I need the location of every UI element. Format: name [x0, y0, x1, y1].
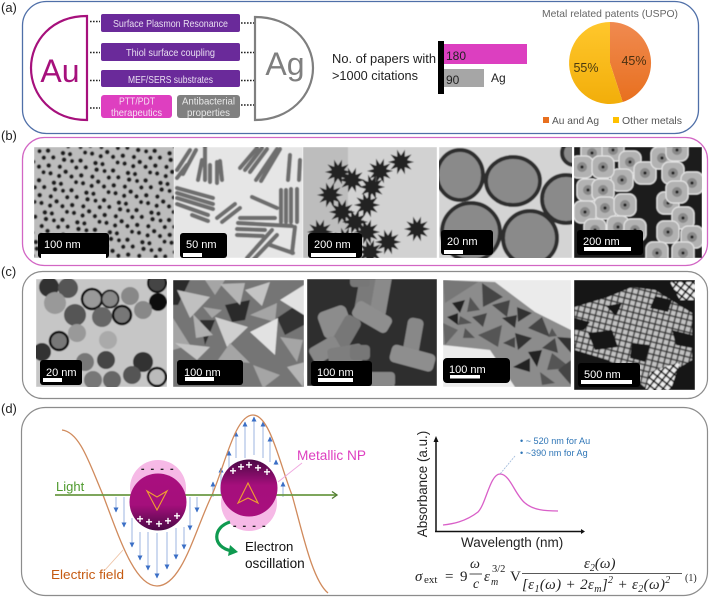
light ray: Light	[56, 479, 85, 494]
equation 1: [ε	[522, 577, 534, 593]
equation 1: =	[445, 569, 453, 585]
nanoparticle with electrons displaced upward	[130, 460, 186, 531]
label: (c): (c)	[1, 264, 16, 279]
pie chart: metal related patents: 45%	[621, 54, 647, 68]
micrograph: Ag nanoprisms: 100 nm	[449, 364, 486, 376]
micrograph: Au nanostars	[303, 147, 437, 264]
nanoparticle with electrons displaced downward: +	[237, 460, 245, 474]
box: PTT/PDT therapeutics: PTT/PDT	[119, 96, 155, 108]
equation 1: V	[510, 569, 521, 585]
equation 1	[415, 556, 697, 595]
box: Antibacterial properties: properties	[187, 108, 230, 119]
label: electric field	[51, 550, 124, 582]
nanoparticle with electrons displaced upward: +	[145, 515, 153, 529]
micrograph: Ag nanocubes	[574, 280, 695, 392]
absorbance chart: Absorbance (a.u.)	[415, 431, 430, 537]
icon: Ag half disc	[255, 17, 313, 120]
bar chart: papers with over 1000 citations: No. of papers with	[332, 51, 436, 66]
pie chart: metal related patents	[542, 9, 682, 127]
label: metallic NP	[278, 448, 366, 482]
equation 1: 2	[638, 584, 644, 595]
label: electron oscillation: oscillation	[245, 556, 305, 571]
micrograph: Ag nanoprisms	[443, 280, 571, 387]
icon: Ag half disc: Ag	[265, 46, 305, 82]
micrograph: Au spheres: 100 nm	[44, 239, 81, 251]
equation 1: + ε	[613, 577, 638, 593]
bar chart: papers with over 1000 citations: Ag	[491, 71, 506, 85]
pie chart: metal related patents: 55%	[573, 61, 599, 75]
equation 1: ext	[424, 574, 437, 586]
light ray	[55, 479, 337, 498]
label: (d): (d)	[1, 401, 17, 416]
equation 1: 3/2	[492, 564, 505, 575]
nanoparticle with electrons displaced downward: - - - -	[233, 520, 267, 532]
absorbance chart: Wavelength (nm)	[461, 535, 563, 550]
micrograph: Au nanocages	[574, 147, 702, 258]
micrograph: Ag nanocubes: 500 nm	[584, 369, 621, 381]
box: Surface Plasmon Resonance	[101, 14, 240, 32]
label: (a): (a)	[1, 0, 17, 15]
equation 1: (1)	[685, 573, 697, 584]
micrograph: Ag octahedra: 100 nm	[184, 367, 221, 379]
dotted connectors	[90, 22, 254, 108]
label: electron oscillation	[245, 539, 305, 571]
equation 1: ]	[601, 577, 608, 593]
micrograph: Au nanorods	[174, 147, 303, 260]
label: electron oscillation: Electron	[245, 539, 293, 554]
equation 1: 9	[460, 569, 468, 585]
micrograph: Au core shell particles: 20 nm	[447, 236, 478, 248]
box: MEF/SERS substrates: MEF/SERS substrates	[128, 75, 213, 86]
micrograph: Au core shell particles	[439, 147, 572, 258]
icon: Au half disc: Au	[40, 53, 80, 89]
nanoparticle with electrons displaced downward: +	[263, 465, 271, 479]
box: Thiol surface coupling	[101, 43, 240, 61]
panel: gold nanostructure micrographs	[22, 138, 708, 266]
box: PTT/PDT therapeutics	[101, 95, 172, 119]
bar chart: papers with over 1000 citations: 180	[446, 49, 466, 63]
equation 1: m	[594, 584, 602, 595]
box: MEF/SERS substrates	[101, 70, 240, 87]
label: (b): (b)	[1, 128, 17, 143]
box: Antibacterial properties	[177, 95, 240, 119]
electric field wave	[62, 415, 328, 593]
bar chart: papers with over 1000 citations: 90	[446, 73, 460, 87]
micrograph: Ag spheres	[33, 274, 167, 389]
nanoparticle with electrons displaced downward	[220, 458, 278, 532]
nanoparticle with electrons displaced upward: - - - -	[141, 463, 175, 475]
micrograph: Ag rounded bars	[307, 271, 437, 387]
box: PTT/PDT therapeutics: therapeutics	[111, 108, 162, 119]
equation 1: (ω)	[595, 556, 616, 572]
equation 1: ω	[470, 557, 480, 572]
absorbance chart: • ~ 520 nm for Au	[520, 436, 590, 446]
nanoparticle with electrons displaced upward: +	[173, 509, 181, 523]
equation 1: 2	[590, 563, 595, 574]
pie chart: metal related patents: Au and Ag	[552, 116, 599, 127]
micrograph: Au spheres	[34, 147, 174, 258]
nanoparticle with electrons displaced upward: +	[136, 512, 144, 526]
box: Antibacterial properties: Antibacterial	[182, 96, 235, 108]
absorbance chart: • ~390 nm for Ag	[520, 448, 588, 458]
pie chart: metal related patents: Other metals	[622, 116, 682, 127]
icon: Au half disc	[31, 16, 87, 120]
equation 1: ε	[584, 556, 590, 572]
micrograph: Au nanorods: 50 nm	[186, 239, 217, 251]
nanoparticle with electrons displaced downward: +	[254, 461, 262, 475]
micrograph: Ag rounded bars: 100 nm	[317, 367, 354, 379]
box: Thiol surface coupling: Thiol surface coupling	[126, 48, 215, 59]
micrograph: Au nanocages: 200 nm	[583, 236, 620, 248]
equation 1: (ω) + 2ε	[540, 577, 594, 593]
bar chart: papers with over 1000 citations: >1000 citations	[332, 68, 418, 83]
absorbance chart	[415, 431, 590, 550]
nanoparticle with electrons displaced downward: +	[229, 464, 237, 478]
equation 1: c	[473, 577, 480, 592]
panel: Au and Ag comparison	[22, 2, 698, 134]
equation 1: m	[491, 577, 498, 588]
panel: silver nanostructure micrographs	[22, 271, 708, 398]
equation 1: σ	[415, 569, 423, 585]
nanoparticle with electrons displaced upward: +	[164, 514, 172, 528]
equation 1: 1	[534, 584, 540, 595]
nanoparticle with electrons displaced upward: +	[155, 517, 163, 531]
micrograph: Au nanostars: 200 nm	[314, 239, 351, 251]
box: Surface Plasmon Resonance: Surface Plasmon Resonance	[113, 19, 228, 30]
equation 1: 2	[608, 575, 613, 586]
field arrows	[116, 417, 283, 578]
panel: localized surface plasmon resonance	[22, 408, 708, 596]
arrow: electron oscillation	[217, 522, 238, 556]
equation 1: (ω)	[644, 577, 665, 593]
micrograph: Ag octahedra	[173, 280, 305, 388]
label: metallic NP: Metallic NP	[297, 448, 366, 463]
equation 1: 2	[665, 575, 671, 586]
pie chart: metal related patents: Metal related patents (USPO)	[542, 9, 678, 20]
bar chart: papers with over 1000 citations	[332, 41, 527, 94]
equation 1: ε	[484, 569, 490, 585]
label: electric field: Electric field	[51, 567, 124, 582]
micrograph: Ag spheres: 20 nm	[46, 367, 77, 379]
nanoparticle with electrons displaced downward: +	[245, 458, 253, 472]
